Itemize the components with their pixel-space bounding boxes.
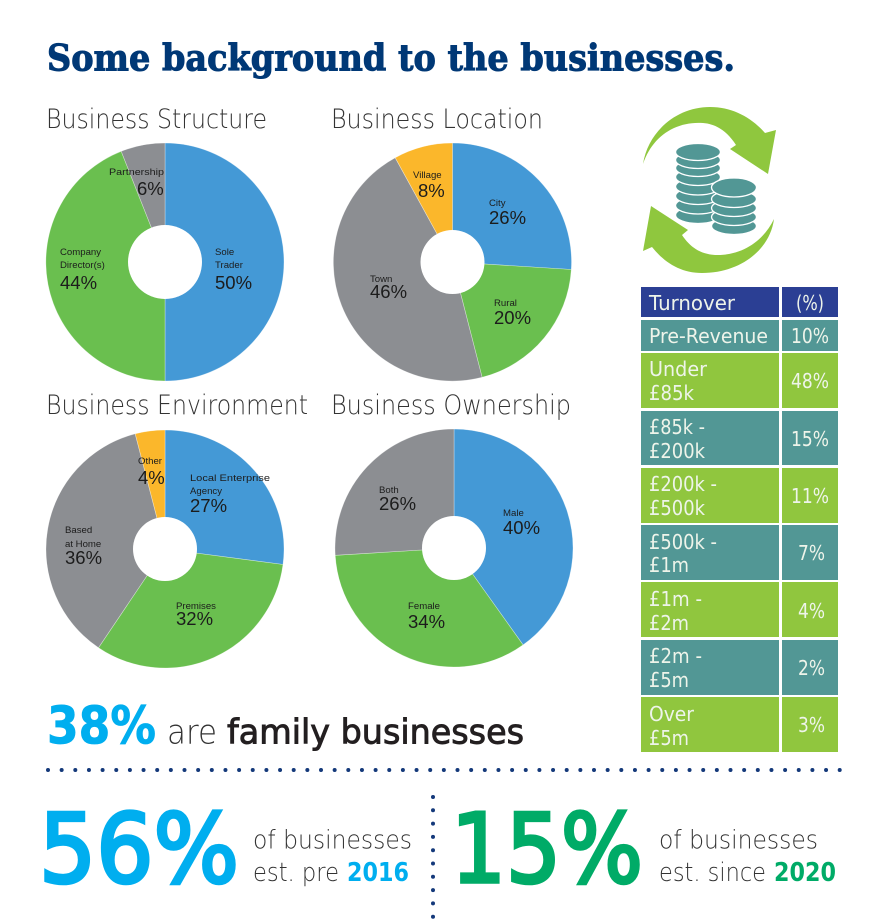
label: village: Village <box>413 170 442 181</box>
icon: left coin stack <box>676 144 720 224</box>
table: turnover <box>641 287 838 752</box>
stat: 15 percent: est. since <box>659 858 766 888</box>
label: based at home: at Home <box>65 539 101 550</box>
stat: 15 percent: 2020 <box>774 858 836 888</box>
label: male: 40% <box>503 517 540 538</box>
label: female <box>408 601 445 632</box>
label: town: 46% <box>370 281 407 302</box>
label: premises <box>176 601 216 629</box>
icon: right coin stack <box>712 178 756 234</box>
donut chart: business structure <box>46 143 284 381</box>
label: partnership <box>109 167 164 199</box>
row: 1m to 2m <box>641 582 838 637</box>
row: pre-revenue: Pre-Revenue <box>649 324 768 348</box>
label: rural: Rural <box>494 298 517 309</box>
heading: business structure: Business Structure <box>46 104 267 135</box>
label: local enterprise agency: Agency <box>190 486 222 497</box>
label: rural: 20% <box>494 307 531 328</box>
label: sole trader: 50% <box>215 272 252 293</box>
row: over 5m: Over <box>649 702 695 726</box>
label: company directors <box>60 247 105 293</box>
label: based at home: 36% <box>65 547 102 568</box>
callout: family businesses: 38% <box>47 696 156 756</box>
row: 2m to 5m: 2% <box>798 656 825 680</box>
label: sole trader <box>215 247 252 293</box>
row: under 85k: 48% <box>791 369 829 393</box>
table header <box>641 287 838 317</box>
row: 85k to 200k: £200k <box>649 439 705 463</box>
table header: Turnover <box>648 291 736 315</box>
label: company directors: 44% <box>60 272 97 293</box>
label: partnership: Partnership <box>109 167 164 178</box>
label: city: City <box>489 198 506 209</box>
stat: 56 percent: 56% <box>39 795 239 905</box>
callout: family businesses: family businesses <box>227 712 524 752</box>
row: 2m to 5m: £5m <box>649 668 689 692</box>
row: pre-revenue <box>641 320 838 351</box>
label: female: 34% <box>408 611 445 632</box>
callout: family businesses: are <box>167 712 217 752</box>
heading: business ownership: Business Ownership <box>331 390 571 421</box>
panel: business location <box>331 104 572 381</box>
label: both: 26% <box>379 493 416 514</box>
label: sole trader: Trader <box>215 260 244 271</box>
row: 85k to 200k: £85k - <box>649 415 705 439</box>
icon: bottom arrow <box>643 206 774 273</box>
label: partnership: 6% <box>137 178 164 199</box>
row: 500k to 1m <box>641 525 838 580</box>
label: company directors: Director(s) <box>60 260 105 271</box>
label: sole trader: Sole <box>215 247 234 258</box>
label: based at home <box>65 525 102 568</box>
row: 85k to 200k <box>641 411 838 465</box>
row: under 85k: £85k <box>649 381 694 405</box>
donut chart: business environment <box>46 430 284 668</box>
row: under 85k <box>641 353 838 408</box>
label: local enterprise agency: Local Enterprise <box>190 473 270 484</box>
label: female: Female <box>408 601 440 612</box>
row: 2m to 5m: £2m - <box>649 644 702 668</box>
row: over 5m <box>641 697 838 752</box>
label: premises: Premises <box>176 601 216 612</box>
label: premises: 32% <box>176 608 213 629</box>
label: based at home: Based <box>65 525 92 536</box>
stat: 15 percent <box>451 795 836 905</box>
row: 500k to 1m: £1m <box>649 553 689 577</box>
row: 2m to 5m <box>641 640 838 695</box>
panel: business ownership <box>331 390 573 667</box>
label: village: 8% <box>418 180 445 201</box>
row: over 5m: 3% <box>798 713 825 737</box>
callout: family businesses <box>47 696 524 756</box>
label: other <box>138 456 165 488</box>
label: local enterprise agency <box>190 473 270 516</box>
label: village <box>413 170 445 201</box>
stat: 56 percent: 2016 <box>347 858 409 888</box>
label: local enterprise agency: 27% <box>190 495 227 516</box>
row: pre-revenue: 10% <box>791 324 829 348</box>
icon: top arrow <box>643 107 776 174</box>
row: under 85k: Under <box>649 357 708 381</box>
label: town: Town <box>370 274 392 285</box>
row: 500k to 1m: 7% <box>798 541 825 565</box>
label: company directors: Company <box>60 247 101 258</box>
donut chart: business ownership <box>335 429 573 667</box>
row: over 5m: £5m <box>649 726 689 750</box>
label: male: Male <box>503 508 524 519</box>
row: 1m to 2m: £2m <box>649 611 689 635</box>
row: 200k to 500k <box>641 468 838 523</box>
stat: 15 percent: of businesses <box>659 826 818 856</box>
table header: (%) <box>796 291 824 315</box>
row: 200k to 500k: £500k <box>649 496 705 520</box>
label: city: 26% <box>489 207 526 228</box>
panel: business structure <box>46 104 284 381</box>
stat: 56 percent <box>39 795 412 905</box>
stat: 56 percent: est. pre <box>253 858 339 888</box>
label: other: Other <box>138 456 163 467</box>
title: Some background to the businesses. <box>47 38 735 80</box>
stat: 56 percent: of businesses <box>253 826 412 856</box>
row: 200k to 500k: 11% <box>791 484 829 508</box>
donut chart: business location <box>333 143 572 381</box>
label: other: 4% <box>138 467 165 488</box>
icon: coins with circular arrows <box>643 107 776 273</box>
row: 500k to 1m: £500k - <box>649 530 717 554</box>
row: 85k to 200k: 15% <box>791 427 829 451</box>
panel: business environment <box>46 390 308 668</box>
stat: 15 percent: 15% <box>451 795 643 905</box>
row: 200k to 500k: £200k - <box>649 472 717 496</box>
row: 1m to 2m: 4% <box>798 599 825 623</box>
row: 1m to 2m: £1m - <box>649 587 702 611</box>
heading: business environment: Business Environment <box>46 390 308 421</box>
label: both: Both <box>379 485 399 496</box>
heading: business location: Business Location <box>331 104 543 135</box>
